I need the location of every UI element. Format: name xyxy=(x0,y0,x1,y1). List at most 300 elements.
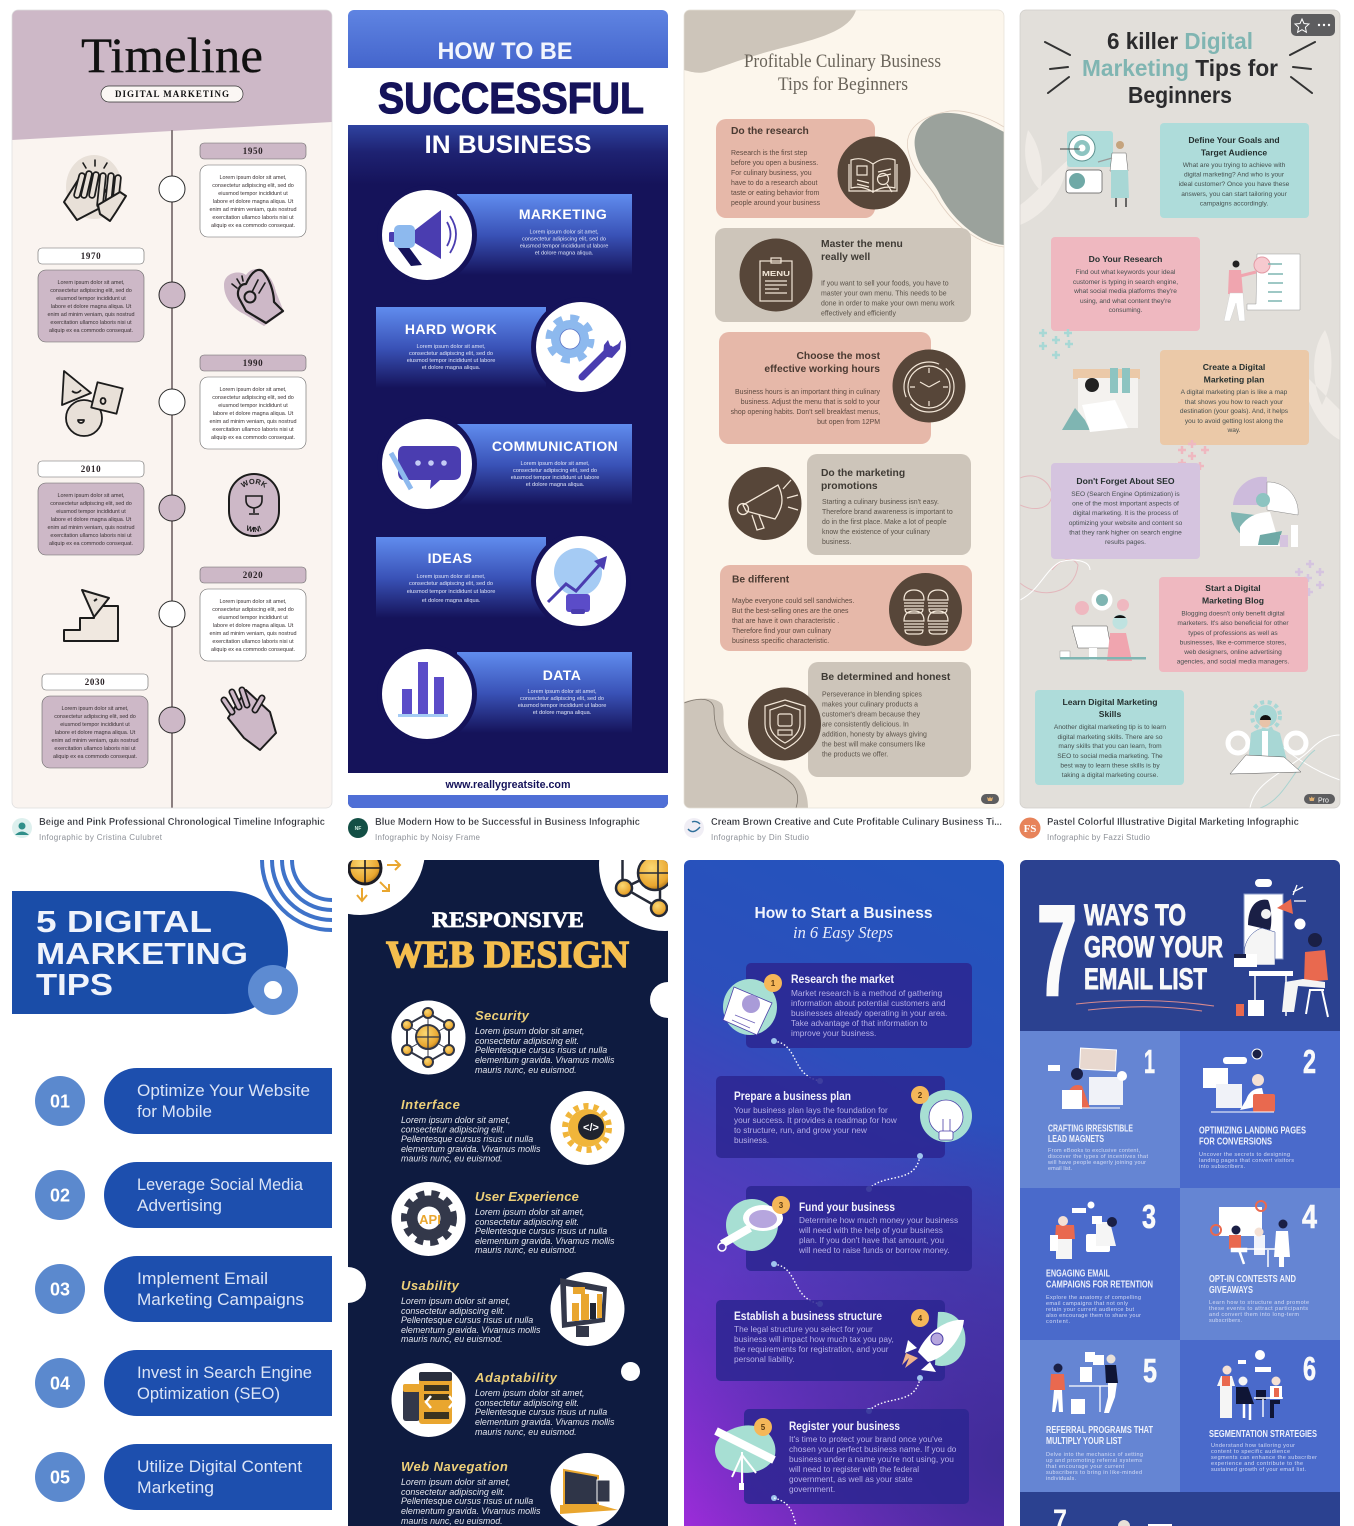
item: interface xyxy=(401,1091,624,1165)
step 1: Take advantage of that information to xyxy=(791,1018,928,1028)
entry 2030: 2030 xyxy=(85,677,105,687)
tip: define goals: campaigns accordingly. xyxy=(1200,200,1268,208)
step 4: and convert them into long-term xyxy=(1209,1312,1299,1318)
tip 05: Marketing xyxy=(137,1478,214,1497)
step 1: email list. xyxy=(1048,1166,1072,1172)
row: ideas: IDEAS xyxy=(428,550,472,566)
step 1: Research the market xyxy=(791,974,894,986)
tip: create a plan: destination (your goals). And, it helps xyxy=(1180,408,1289,415)
tip: create a plan: way. xyxy=(1226,427,1241,434)
row: hard work xyxy=(376,302,626,392)
tip: start a blog xyxy=(1159,577,1308,672)
item: adaptability: elementum gravida. Vivamus mollis xyxy=(475,1417,615,1427)
tip: define goals xyxy=(1160,123,1309,218)
heading: Marketing Tips for xyxy=(1082,55,1278,81)
tip: working hours: Business hours is an important thing in culinary xyxy=(735,389,881,396)
tip: marketing promotions: promotions xyxy=(821,481,878,492)
heading: profitable culinary: Tips for Beginners xyxy=(778,74,908,95)
item: security: elementum gravida. Vivamus mollis xyxy=(475,1055,615,1065)
icon: work win badge: WIN! xyxy=(247,525,262,532)
entry 2020: eiusmod tempor incididunt ut xyxy=(218,615,288,621)
step 2 xyxy=(1199,1043,1316,1170)
step 4: OPT-IN CONTESTS AND xyxy=(1209,1273,1296,1285)
entry 2020: consectetur adipiscing elit, sed do xyxy=(212,607,294,613)
badge: crown xyxy=(981,794,999,804)
tip: master the menu: master your own menu. This needs to be xyxy=(821,290,947,298)
card outline 3 xyxy=(684,10,1004,808)
tip: seo: Don't Forget About SEO xyxy=(1076,476,1175,486)
tip: determined and honest xyxy=(748,662,971,777)
entry 1950: 1950 xyxy=(243,146,263,156)
entry 1950: aliquip ex ea commodo consequat. xyxy=(211,223,295,229)
tip: do the research: taste or eating behavior from xyxy=(731,190,820,197)
entry 2020: labore et dolore magna aliqua. Ut xyxy=(213,623,294,629)
step 6: content to specific audience xyxy=(1211,1449,1290,1455)
item: user experience xyxy=(392,1182,615,1256)
entry 1990: 1990 xyxy=(243,358,263,368)
tip: determined and honest: addition, honesty by always giving xyxy=(822,732,927,738)
step 6 xyxy=(1209,1350,1317,1473)
step 3: content. xyxy=(1046,1319,1070,1325)
tip: working hours: business. Adjust the menu that is sold to your xyxy=(741,399,881,406)
tip: master the menu: effectively and efficiently xyxy=(821,310,896,318)
decor: corner arcs xyxy=(262,790,402,930)
tip 02: Leverage Social Media xyxy=(137,1175,304,1194)
item: interface: consectetur adipiscing elit. xyxy=(401,1124,505,1134)
header band xyxy=(12,10,332,140)
entry 2010: labore et dolore magna aliqua. Ut xyxy=(51,517,132,523)
decor: white corner circles xyxy=(295,785,731,1381)
tip: create a plan: Create a Digital xyxy=(1203,362,1265,372)
row: marketing: Lorem ipsum dolor sit amet, xyxy=(529,230,599,236)
tip: learn skills: digital marketing skills. There are so xyxy=(1057,734,1163,741)
icon: high five xyxy=(64,155,126,221)
tip: master the menu: really well xyxy=(821,252,870,263)
badge: pro: Pro xyxy=(1318,798,1329,804)
big seven: 7 xyxy=(1037,880,1077,1023)
card outline 4 xyxy=(1020,10,1340,808)
tip 04: Optimization (SEO) xyxy=(137,1384,280,1403)
tip 01 xyxy=(35,1068,332,1134)
decorative leaves and squiggles xyxy=(1020,130,1340,808)
heading: How to Start a Business xyxy=(754,905,933,922)
tip: master the menu: done in order to make your own menu work xyxy=(821,300,955,308)
item: security: Pellentesque cursus risus ut nulla xyxy=(475,1045,607,1055)
caption: successful card: Blue Modern How to be Successful in Business Infographic xyxy=(375,817,640,828)
heading: 5 DIGITAL xyxy=(36,905,212,939)
heading: profitable culinary: Profitable Culinary Business xyxy=(744,51,941,72)
blob right xyxy=(907,111,1004,247)
entry 1970: 1970 xyxy=(81,251,101,261)
tip: determined and honest: customer's dream because they xyxy=(822,712,921,718)
step 4: GIVEAWAYS xyxy=(1209,1284,1253,1296)
tip: master the menu xyxy=(715,228,971,322)
tip: learn skills: Learn Digital Marketing xyxy=(1062,697,1158,707)
row: data xyxy=(382,649,632,739)
caption: culinary card: Cream Brown Creative and Cute Profitable Culinary Business Ti... xyxy=(711,817,1002,828)
tip 05: 05 xyxy=(50,1468,70,1488)
tip: start a blog: marketers. It's also beneficial for other xyxy=(1177,620,1289,627)
illustration: man with gears xyxy=(1228,702,1306,774)
step 2: Your business plan lays the foundation for xyxy=(734,1105,888,1115)
tip: master the menu: Master the menu xyxy=(821,239,903,250)
item: usability: consectetur adipiscing elit. xyxy=(401,1306,505,1316)
tip 02: 02 xyxy=(50,1186,70,1206)
step 3: Determine how much money your business xyxy=(799,1215,958,1225)
illustration: man planning xyxy=(1062,368,1140,432)
entry 1970: enim ad minim veniam, quis nostrud xyxy=(47,312,135,318)
tip: define goals: Define Your Goals and xyxy=(1188,135,1280,145)
entry 2020: exercitation ullamco laboris nisi ut xyxy=(212,639,294,645)
step 5: 5 xyxy=(761,1423,766,1432)
heading: TIPS xyxy=(36,968,113,1002)
step 3: also encourage them to share your xyxy=(1046,1313,1141,1319)
tip: start a blog: types of professions as well as xyxy=(1188,630,1278,637)
tip: marketing promotions: business. xyxy=(822,539,851,546)
entry 2010: exercitation ullamco laboris nisi ut xyxy=(50,533,132,539)
step 5 xyxy=(1046,1352,1157,1482)
step 6: segments can enhance the subscriber xyxy=(1211,1455,1317,1461)
sunburst strokes xyxy=(1045,42,1315,93)
step 5: individuals. xyxy=(1046,1476,1076,1482)
item: user experience: Lorem ipsum dolor sit amet, xyxy=(475,1207,584,1217)
entry 1970: eiusmod tempor incididunt ut xyxy=(56,296,126,302)
icon: hands together xyxy=(224,690,276,750)
row: marketing: et dolore magna aliqua. xyxy=(535,250,594,256)
header dot xyxy=(248,965,298,1015)
illustration: woman with checklist xyxy=(1224,254,1300,321)
heading: RESPONSIVE xyxy=(432,907,584,932)
header shape xyxy=(12,891,288,1014)
tip: determined and honest: Perseverance in blending spices xyxy=(822,692,922,698)
tip: do the research xyxy=(716,119,910,218)
item: usability: Lorem ipsum dolor sit amet, xyxy=(401,1296,510,1306)
tip: do your research: Do Your Research xyxy=(1089,254,1162,264)
step 1 xyxy=(1047,1043,1155,1172)
tip 04: 04 xyxy=(50,1374,70,1394)
tip: marketing promotions: Starting a culinary business isn't easy. xyxy=(822,499,939,506)
item: web navigation: elementum gravida. Vivamus mollis xyxy=(401,1506,541,1516)
tip: marketing promotions xyxy=(728,454,971,555)
row: data: DATA xyxy=(543,667,581,683)
panel: how to start a business xyxy=(684,860,1004,1526)
tip: learn skills xyxy=(1035,690,1184,785)
tip: be different: Be different xyxy=(732,574,790,586)
tip: marketing promotions: Therefore brand awareness is important to xyxy=(822,509,953,516)
icon: ok hand xyxy=(224,269,284,326)
row: communication xyxy=(382,419,632,509)
tip 04: Invest in Search Engine xyxy=(137,1363,312,1382)
tip: define goals: Target Audience xyxy=(1201,148,1267,158)
step 5 xyxy=(715,1409,969,1504)
caption: successful card: NF xyxy=(355,826,361,832)
entry 1990: eiusmod tempor incididunt ut xyxy=(218,403,288,409)
lower gradient xyxy=(348,125,668,174)
item: web navigation: Lorem ipsum dolor sit amet, xyxy=(401,1477,510,1487)
step 1: information about potential customers and xyxy=(791,998,946,1008)
entry 2030: labore et dolore magna aliqua. Ut xyxy=(55,730,136,736)
row: data: consectetur adipiscing elit, sed do xyxy=(520,696,604,702)
step 6: 6 xyxy=(1303,1350,1316,1387)
entry 2010: consectetur adipiscing elit, sed do xyxy=(50,501,132,507)
card outline 1 xyxy=(12,10,332,808)
icon: emoji shapes xyxy=(62,371,123,436)
entry 2020: enim ad minim veniam, quis nostrud xyxy=(209,631,297,637)
row: data: eiusmod tempor incididunt ut labore xyxy=(518,703,606,709)
tip: create a plan: A digital marketing plan is like a map xyxy=(1181,389,1288,396)
tip: start a blog: Start a Digital xyxy=(1205,583,1261,593)
entry 1990: labore et dolore magna aliqua. Ut xyxy=(213,411,294,417)
title: Timeline: Timeline xyxy=(81,27,263,83)
illustration: megaphone woman and man at desk xyxy=(1234,879,1328,1017)
entry 1990 xyxy=(200,355,306,449)
item: adaptability: mauris nunc, eu euismod. xyxy=(475,1427,577,1437)
row: data: Lorem ipsum dolor sit amet, xyxy=(527,689,597,695)
tip: be different: But the best-selling ones are the ones xyxy=(732,608,849,615)
item: web navigation: Web Navegation xyxy=(401,1459,508,1474)
item: adaptability: consectetur adipiscing elit. xyxy=(475,1398,579,1408)
tip: define goals: digital marketing? And who is your xyxy=(1184,172,1285,178)
step 4 xyxy=(716,1300,965,1381)
tip: define goals: What are you trying to achieve with xyxy=(1183,162,1286,169)
item: user experience: API xyxy=(419,1212,441,1227)
row: hard work: consectetur adipiscing elit, sed do xyxy=(409,351,493,357)
step 5: government. xyxy=(789,1484,835,1494)
step 2 xyxy=(716,1076,972,1158)
step 1 xyxy=(723,963,972,1048)
item: security: mauris nunc, eu euismod. xyxy=(475,1065,577,1075)
tip: working hours xyxy=(719,332,966,444)
tip 05: Utilize Digital Content xyxy=(137,1457,302,1476)
tip: define goals: answers, you can start tailoring your xyxy=(1181,191,1288,198)
tip: do the research: Research is the first step xyxy=(731,150,807,157)
icon: corner globe with arrows xyxy=(349,852,400,901)
step 1: CRAFTING IRRESISTIBLE xyxy=(1048,1122,1133,1134)
tip: do the research: have to do a research about xyxy=(731,180,817,187)
step 4: these events to attract participants xyxy=(1209,1306,1308,1312)
step 4: business will impact how much tax you pay, xyxy=(734,1334,894,1344)
tip 01: for Mobile xyxy=(137,1102,212,1121)
icon: stairs xyxy=(64,590,118,641)
step 4: The legal structure you select for your xyxy=(734,1324,873,1334)
step 2: Uncover the secrets to designing xyxy=(1199,1152,1290,1158)
step 2: landing pages that convert visitors xyxy=(1199,1158,1294,1164)
step 6: sustained growth of your email list. xyxy=(1211,1467,1306,1473)
tip 03: Marketing Campaigns xyxy=(137,1290,304,1309)
entry 1990: Lorem ipsum dolor sit amet, xyxy=(219,387,287,393)
heading lines: WAYS TO xyxy=(1084,899,1186,932)
heading: WEB DESIGN xyxy=(386,934,629,976)
step 4: personal liability. xyxy=(734,1354,795,1364)
options button xyxy=(1291,14,1335,36)
tip 04 xyxy=(35,1350,332,1416)
heading xyxy=(36,905,248,1002)
row: marketing xyxy=(382,190,632,280)
tip: learn skills: best way to learn these skills is by xyxy=(1060,762,1160,770)
tip: determined and honest: are consistently delicious. In xyxy=(822,722,909,728)
entry 2030: Lorem ipsum dolor sit amet, xyxy=(61,706,129,712)
step 3 xyxy=(1046,1198,1156,1325)
heading lines xyxy=(1084,899,1223,996)
tip: master the menu: MENU xyxy=(762,269,790,278)
step 2: to structure, run, and grow your new xyxy=(734,1125,868,1135)
tip: start a blog: web designers, online advertising xyxy=(1183,649,1282,656)
badge: pro xyxy=(1304,794,1335,804)
entry 1970: labore et dolore magna aliqua. Ut xyxy=(51,304,132,310)
step 3: email campaigns that not only xyxy=(1046,1301,1128,1307)
step 2: Prepare a business plan xyxy=(734,1091,851,1103)
entry 2030: exercitation ullamco laboris nisi ut xyxy=(54,746,136,752)
caption: timeline card: Beige and Pink Professional Chronological Timeline Infographic xyxy=(39,817,325,828)
tip: determined and honest: the products we offer. xyxy=(822,752,888,758)
step 2: into subscribers. xyxy=(1199,1164,1245,1170)
panel: grow your email list xyxy=(1020,860,1340,1526)
step 6: experience and contribute to the xyxy=(1211,1461,1303,1467)
step 3: ENGAGING EMAIL xyxy=(1046,1268,1110,1280)
entry 2020 xyxy=(200,567,306,661)
step 3: retain your current audience but xyxy=(1046,1307,1134,1313)
item: interface: elementum gravida. Vivamus mollis xyxy=(401,1144,541,1154)
subtitle pill xyxy=(101,86,243,102)
step 4: 4 xyxy=(918,1314,923,1323)
step 4: 4 xyxy=(1302,1198,1318,1235)
caption: digital marketing card: Infographic by Fazzi Studio xyxy=(1047,833,1151,842)
entry 1990: aliquip ex ea commodo consequat. xyxy=(211,435,295,441)
entry 2010: enim ad minim veniam, quis nostrud xyxy=(47,525,135,531)
item: user experience: Pellentesque cursus risus ut nulla xyxy=(475,1226,607,1236)
entry 2010: Lorem ipsum dolor sit amet, xyxy=(57,493,125,499)
connector 5-6 xyxy=(771,1495,796,1526)
tip: do your research: using, and what content they're xyxy=(1080,298,1171,305)
entry 2010: eiusmod tempor incididunt ut xyxy=(56,509,126,515)
tip: start a blog: businesses, like e-commerce stores, xyxy=(1180,640,1286,646)
step 2: 2 xyxy=(918,1091,923,1100)
tip: do your research: Find out what keywords your ideal xyxy=(1076,269,1176,276)
tip: working hours: effective working hours xyxy=(764,364,880,375)
step 1: LEAD MAGNETS xyxy=(1048,1133,1104,1145)
step 5: Register your business xyxy=(789,1421,900,1433)
tip: define goals: ideal customer? Once you have these xyxy=(1179,181,1290,188)
tip 02 xyxy=(35,1162,332,1228)
entry 1950: Lorem ipsum dolor sit amet, xyxy=(219,175,287,181)
heading: successful: SUCCESSFUL xyxy=(378,74,644,123)
row: ideas xyxy=(376,536,626,626)
row: marketing: consectetur adipiscing elit, sed do xyxy=(522,236,606,242)
panel: responsive web design xyxy=(295,785,731,1526)
icon: work win badge: WORK xyxy=(240,478,268,488)
blob bottom left xyxy=(684,698,808,808)
item: adaptability: Lorem ipsum dolor sit amet, xyxy=(475,1388,584,1398)
entry 1970: exercitation ullamco laboris nisi ut xyxy=(50,320,132,326)
item: interface: Lorem ipsum dolor sit amet, xyxy=(401,1115,510,1125)
step 1: businesses already operating in your area. xyxy=(791,1008,947,1018)
connector 4-5 xyxy=(866,1375,923,1414)
step 4: Learn how to structure and promote xyxy=(1209,1300,1309,1306)
item: adaptability: Adaptability xyxy=(474,1370,558,1385)
item: usability: Pellentesque cursus risus ut nulla xyxy=(401,1315,533,1325)
item: security: Security xyxy=(475,1008,530,1023)
item: user experience: User Experience xyxy=(475,1189,579,1204)
step 5: It's time to protect your brand once you've xyxy=(789,1434,943,1444)
heading: 6 killer Digital xyxy=(1107,28,1253,54)
caption: culinary card: Infographic by Din Studio xyxy=(711,833,810,842)
tip: determined and honest: makes your culinary products a xyxy=(822,702,918,708)
tip: be different: that are have it own characteristic . xyxy=(732,618,839,625)
entry 2010: 2010 xyxy=(81,464,101,474)
heading: Beginners xyxy=(1128,82,1232,108)
step 3: Explore the anatomy of compelling xyxy=(1046,1295,1141,1301)
tip 03: Implement Email xyxy=(137,1269,268,1288)
tip: create a plan: Marketing plan xyxy=(1204,374,1264,384)
heading xyxy=(1082,28,1278,108)
heading lines: EMAIL LIST xyxy=(1084,963,1207,996)
panel: timeline infographic xyxy=(12,10,332,808)
step 1: Market research is a method of gathering xyxy=(791,988,943,998)
subtitle pill: DIGITAL MARKETING xyxy=(115,89,229,99)
heading xyxy=(386,907,629,976)
tip: be different: business specific characteristic. xyxy=(732,638,829,645)
step 5: MULTIPLY YOUR LIST xyxy=(1046,1435,1122,1447)
item: interface: mauris nunc, eu euismod. xyxy=(401,1154,503,1164)
entry 2020: Lorem ipsum dolor sit amet, xyxy=(219,599,287,605)
tip: working hours: Choose the most xyxy=(796,351,881,362)
step 5: that encourage your current xyxy=(1046,1464,1124,1470)
row: ideas: et dolore magna aliqua. xyxy=(422,598,481,604)
row: communication: consectetur adipiscing elit, sed do xyxy=(513,468,597,474)
item: interface: Interface xyxy=(401,1097,460,1112)
step 1: 1 xyxy=(1144,1043,1155,1080)
row: communication: et dolore magna aliqua. xyxy=(526,482,585,488)
entry 1950: exercitation ullamco laboris nisi ut xyxy=(212,215,294,221)
step 5: 5 xyxy=(1143,1352,1157,1389)
entry 2020: 2020 xyxy=(243,570,263,580)
tip 03: 03 xyxy=(50,1280,70,1300)
item: security xyxy=(392,1000,615,1075)
item: user experience: elementum gravida. Vivamus mollis xyxy=(475,1236,615,1246)
entry 2030: aliquip ex ea commodo consequat. xyxy=(53,754,137,760)
step 2: business. xyxy=(734,1135,769,1145)
caption: timeline card: Infographic by Cristina Culubret xyxy=(39,833,163,842)
entry 1970: consectetur adipiscing elit, sed do xyxy=(50,288,132,294)
step 6: Understand how tailoring your xyxy=(1211,1443,1295,1449)
step 1: improve your business. xyxy=(791,1028,876,1038)
icon: work win badge xyxy=(228,473,280,537)
step 7 partial xyxy=(1053,1503,1172,1526)
step 3: plan. If you don't have that amount, you xyxy=(799,1235,944,1245)
row: hard work: Lorem ipsum dolor sit amet, xyxy=(416,344,486,350)
entry 1970: Lorem ipsum dolor sit amet, xyxy=(57,280,125,286)
tip: create a plan: that shows you how to reach your xyxy=(1185,399,1284,406)
decor: pink plus marks xyxy=(1178,440,1209,470)
subheading script: in 6 Easy Steps xyxy=(793,923,893,942)
step 3: 3 xyxy=(1142,1198,1156,1235)
caption: digital marketing card xyxy=(1020,817,1299,842)
entry 2020: aliquip ex ea commodo consequat. xyxy=(211,647,295,653)
panel: 5 digital marketing tips xyxy=(12,790,402,1526)
panel: digital marketing tips xyxy=(1020,10,1340,808)
panel: culinary business tips xyxy=(684,10,1004,808)
tip: determined and honest: Be determined and honest xyxy=(821,672,951,683)
tip: be different: Therefore find your own culinary xyxy=(732,628,832,635)
row: hard work: eiusmod tempor incididunt ut labore xyxy=(407,358,495,364)
tip: start a blog: Blogging doesn't only benefit digital xyxy=(1181,610,1285,618)
step 4 xyxy=(1209,1198,1318,1324)
tip: working hours: but open from 12PM xyxy=(817,419,880,426)
step 5: Delve into the mechanics of setting xyxy=(1046,1452,1143,1458)
row: communication: eiusmod tempor incididunt ut labore xyxy=(511,475,599,481)
illustration: woman with target xyxy=(1060,131,1129,207)
tip: seo: results pages. xyxy=(1105,539,1146,546)
